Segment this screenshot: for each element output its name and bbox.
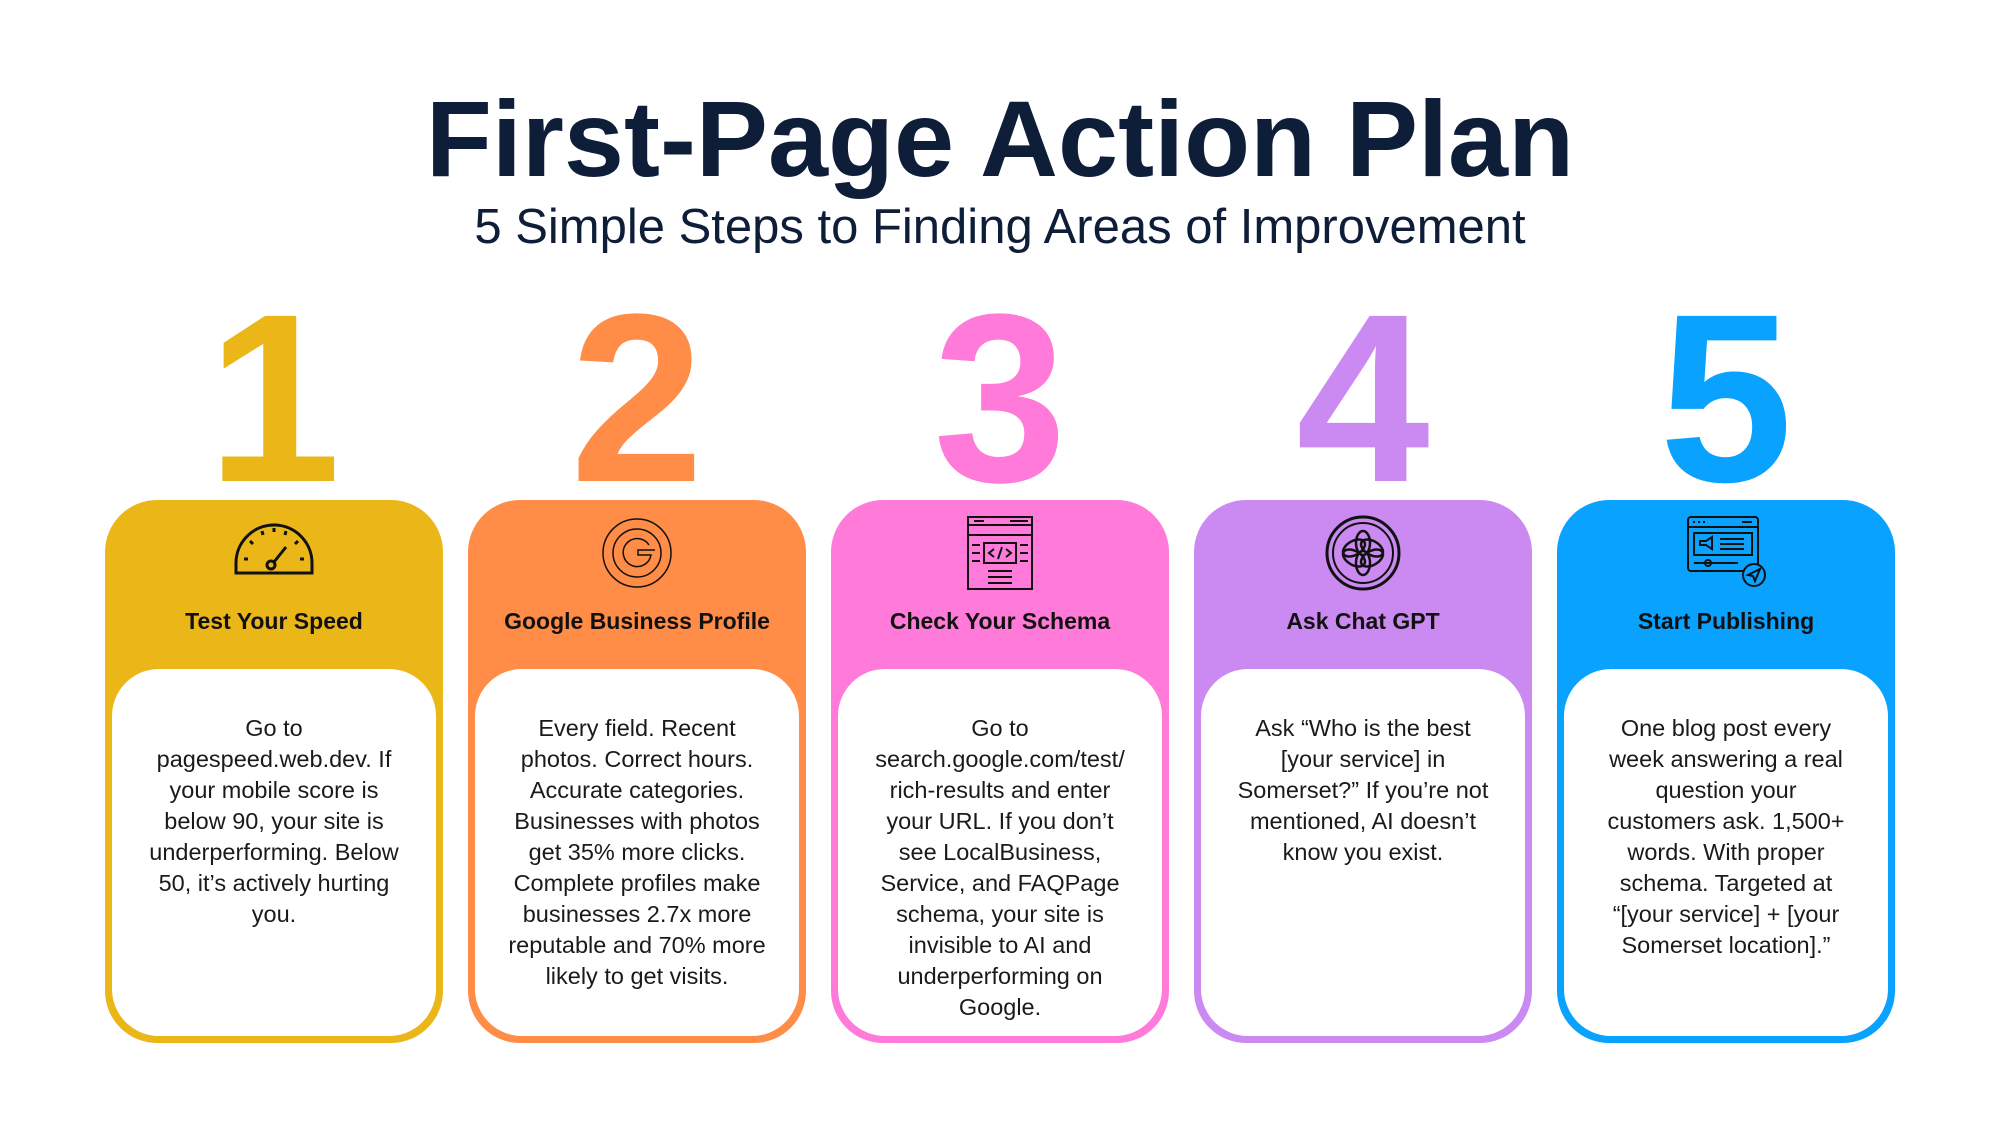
text: week answering a real <box>1609 746 1843 772</box>
subtitle: 5 Simple Steps to Finding Areas of Improvement <box>474 200 1526 254</box>
panel: check your schema <box>831 500 1169 1043</box>
panel: ask chat gpt <box>1194 500 1532 1043</box>
text: Accurate categories. <box>530 777 744 803</box>
icon: google G <box>602 518 672 588</box>
text: schema. Targeted at <box>1620 870 1832 896</box>
text: 50, it’s actively hurting <box>159 870 389 896</box>
text: businesses 2.7x more <box>523 901 751 927</box>
text: Businesses with photos <box>514 808 760 834</box>
text <box>472 666 802 1039</box>
heading: Test Your Speed <box>185 608 363 634</box>
text: “[your service] + [your <box>1613 901 1839 927</box>
text: Go to <box>245 715 303 741</box>
text: know you exist. <box>1283 839 1443 865</box>
heading: Check Your Schema <box>890 608 1110 634</box>
text <box>1198 666 1528 1039</box>
number 5: 5 <box>1659 264 1793 532</box>
text: see LocalBusiness, <box>899 839 1101 865</box>
number 2: 2 <box>570 264 704 532</box>
text: reputable and 70% more <box>508 932 766 958</box>
text: your URL. If you don’t <box>886 808 1114 834</box>
text: you. <box>252 901 296 927</box>
text: search.google.com/test/ <box>875 746 1125 772</box>
text: Google. <box>959 994 1041 1020</box>
text: rich-results and enter <box>890 777 1110 803</box>
icon: chatgpt logo <box>1326 516 1400 590</box>
text <box>1561 666 1891 1039</box>
title: First-Page Action Plan <box>426 78 1574 199</box>
heading: Ask Chat GPT <box>1286 608 1440 634</box>
text: Every field. Recent <box>538 715 736 741</box>
text: schema, your site is <box>896 901 1104 927</box>
text: underperforming on <box>897 963 1103 989</box>
heading: Google Business Profile <box>504 608 770 634</box>
text: Somerset?” If you’re not <box>1238 777 1488 803</box>
icon: speedometer <box>234 524 314 574</box>
text: pagespeed.web.dev. If <box>157 746 391 772</box>
text: mentioned, AI doesn’t <box>1250 808 1476 834</box>
heading: Start Publishing <box>1638 608 1814 634</box>
text: Ask “Who is the best <box>1255 715 1471 741</box>
text: Go to <box>971 715 1029 741</box>
text: invisible to AI and <box>909 932 1091 958</box>
text: words. With proper <box>1627 839 1825 865</box>
text: Service, and FAQPage <box>880 870 1120 896</box>
text: question your <box>1655 777 1797 803</box>
text <box>109 666 439 1039</box>
text: underperforming. Below <box>149 839 399 865</box>
number 1: 1 <box>207 264 341 532</box>
text: One blog post every <box>1621 715 1831 741</box>
text: Complete profiles make <box>514 870 760 896</box>
panel: start publishing <box>1557 500 1895 1043</box>
text: below 90, your site is <box>164 808 384 834</box>
text: customers ask. 1,500+ <box>1607 808 1845 834</box>
text: Somerset location].” <box>1622 932 1830 958</box>
icon: code page <box>967 516 1033 590</box>
text: photos. Correct hours. <box>521 746 753 772</box>
panel: test your speed <box>105 500 443 1043</box>
panel: google business profile <box>468 500 806 1043</box>
text <box>835 666 1165 1039</box>
text: likely to get visits. <box>546 963 728 989</box>
text: get 35% more clicks. <box>529 839 745 865</box>
number 4: 4 <box>1296 264 1430 532</box>
text: your mobile score is <box>170 777 378 803</box>
text: [your service] in <box>1281 746 1445 772</box>
number 3: 3 <box>933 264 1067 532</box>
icon: publishing screen <box>1687 516 1766 587</box>
